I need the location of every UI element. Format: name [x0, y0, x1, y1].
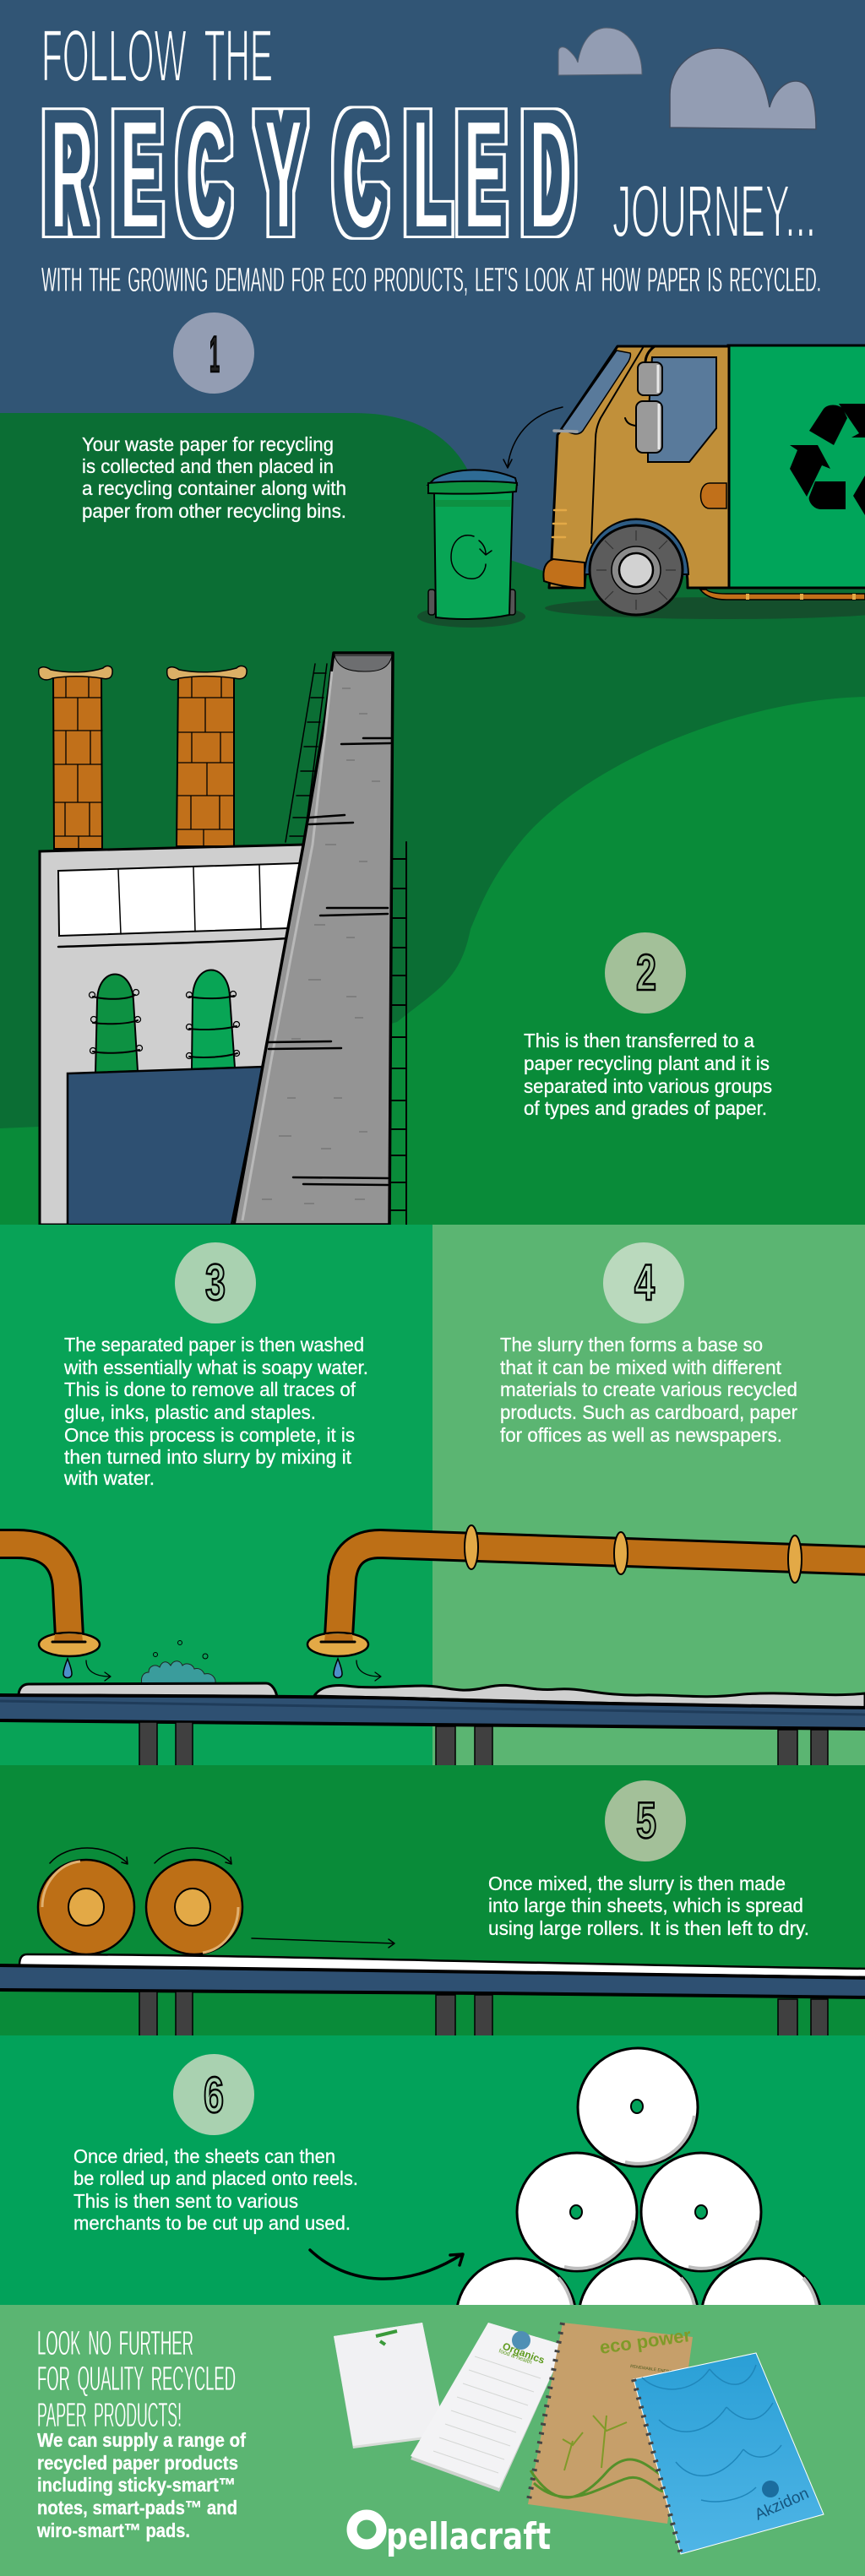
step 3 badge: 3: [205, 1254, 226, 1311]
text: FOR QUALITY RECYCLED: [37, 2359, 236, 2398]
icon: large cloud: [670, 48, 816, 129]
product: organics pad: Organics: [501, 2340, 547, 2367]
step 1 text: is collected and then placed in: [82, 455, 334, 477]
ladder left of tower: [286, 664, 327, 842]
step 5 text: Once mixed, the slurry is then made: [488, 1872, 786, 1894]
footer text: recycled paper products: [37, 2452, 238, 2474]
tower: [234, 653, 393, 1225]
footer text: We can supply a range of: [37, 2429, 246, 2451]
factory building: [40, 845, 304, 1225]
logo: pellacraft: [351, 2515, 551, 2558]
step 3 text: This is done to remove all traces of: [64, 1378, 356, 1400]
step 4 text: that it can be mixed with different: [500, 1356, 782, 1378]
arrow: to bin: [503, 407, 563, 468]
step 4 text: for offices as well as newspapers.: [500, 1424, 782, 1446]
product: eco power notebook: RENEWABLE ENERGY: [630, 2364, 676, 2376]
step 2 badge: 2: [636, 944, 656, 1001]
van shadow: [545, 597, 865, 619]
step 6 text: This is then sent to various: [73, 2190, 298, 2212]
icon: small cloud: [558, 28, 642, 75]
step 3 text: [63, 1334, 368, 1489]
step 4 badge: 4: [634, 1254, 655, 1311]
side window: [648, 357, 716, 462]
step 4 text: materials to create various recycled: [500, 1378, 797, 1400]
step 2 text: separated into various groups: [524, 1075, 772, 1097]
step 6 badge: [173, 2054, 254, 2135]
step 5 text: using large rollers. It is then left to dry.: [488, 1917, 809, 1939]
wiper: [554, 431, 577, 432]
ladder right of tower: [389, 842, 406, 1225]
product: akzidon notebook: Akzidon: [752, 2485, 812, 2524]
footer heading: LOOK NO FURTHER: [37, 2323, 193, 2362]
van: [543, 345, 865, 619]
blue panel: [68, 1067, 264, 1225]
background: sky: [0, 0, 865, 608]
title block: [41, 15, 821, 299]
title block: FOLLOW THE: [41, 15, 273, 97]
chimney right: [167, 666, 247, 846]
right pipe: [307, 1525, 865, 1681]
step 6 text: merchants to be cut up and used.: [73, 2212, 351, 2234]
step 3 text: glue, inks, plastic and staples.: [64, 1401, 316, 1423]
step 4 text: The slurry then forms a base so: [500, 1334, 763, 1356]
tray of paper: [19, 1683, 277, 1698]
conveyor table: [0, 1695, 865, 1766]
step 3 text: with water.: [63, 1467, 155, 1489]
step 1 text: paper from other recycling bins.: [82, 500, 346, 522]
product: organics pad: food & health: [498, 2348, 533, 2366]
step 3 text: then turned into slurry by mixing it: [64, 1446, 352, 1468]
tank right: [186, 970, 240, 1069]
soap splash: [141, 1640, 215, 1684]
step 2 badge: [605, 932, 686, 1014]
product: akzidon notebook: [634, 2353, 824, 2554]
arrow: sheet direction: [252, 1938, 394, 1948]
product: plain sticky pad: [334, 2323, 445, 2448]
step 6 text: Once dried, the sheets can then: [73, 2145, 335, 2167]
product: eco power notebook: eco power: [598, 2324, 693, 2358]
background: dark green hill: [0, 413, 865, 1225]
van cab: [549, 346, 729, 588]
step 6 text: be rolled up and placed onto reels.: [73, 2167, 358, 2189]
step 5 badge: 5: [636, 1792, 656, 1849]
step 2 text: [524, 1030, 772, 1119]
tower highlight: [242, 671, 332, 1220]
step 1 text: [82, 433, 346, 522]
step 1 badge: 1: [209, 326, 220, 383]
footer text: wiro-smart™ pads.: [36, 2519, 190, 2541]
logo: pellacraft: pellacraft: [386, 2515, 551, 2558]
step 3 badge: [175, 1242, 256, 1323]
product: eco power notebook: [528, 2323, 693, 2524]
step 4 badge: [603, 1242, 684, 1323]
tank left: [90, 975, 142, 1073]
van underside trim: [700, 590, 865, 600]
step 5 badge: [605, 1780, 686, 1861]
wheel: [590, 525, 683, 615]
conveyor table: [0, 1965, 865, 2036]
step 1 badge: [173, 312, 254, 394]
wheel arch: [585, 519, 688, 574]
panel: step 6 background: [0, 2035, 865, 2306]
recycling symbol: [790, 404, 865, 515]
panel: step 3 background: [0, 1225, 432, 1765]
slurry layer: [314, 1685, 865, 1709]
paper reels: [456, 2048, 821, 2377]
step 6 text: [73, 2145, 358, 2234]
pipe rings: [465, 1525, 478, 1569]
door line: [591, 346, 644, 543]
step 3 text: with essentially what is soapy water.: [63, 1356, 368, 1378]
grille marks: [552, 510, 566, 537]
panel: products footer: [0, 2305, 865, 2576]
factory windows: [58, 863, 301, 947]
step 5 text: into large thin sheets, which is spread: [488, 1894, 803, 1916]
rollers: [38, 1848, 242, 1954]
step 1 text: a recycling container along with: [82, 477, 346, 499]
windscreen: [562, 351, 630, 434]
step 4 text: products. Such as cardboard, paper: [500, 1401, 797, 1423]
footer heading: PAPER PRODUCTS!: [37, 2395, 182, 2434]
factory: [39, 653, 406, 1225]
left pipe: [0, 1544, 111, 1681]
chimney left: [39, 666, 112, 849]
step 1 text: Your waste paper for recycling: [82, 433, 334, 455]
step 2 text: of types and grades of paper.: [524, 1097, 767, 1119]
tower cracks: [269, 738, 390, 1185]
tower texture: [262, 688, 380, 1204]
icon: recycling bin: [417, 470, 525, 628]
footer text: including sticky-smart™: [37, 2474, 236, 2496]
footer heading: [37, 2323, 236, 2434]
step 5 text: [488, 1872, 809, 1939]
step 2 text: paper recycling plant and it is: [524, 1052, 770, 1074]
step 3 text: Once this process is complete, it is: [64, 1424, 355, 1446]
panel: step 5 background: [0, 1765, 865, 2035]
white paper sheet: [19, 1954, 865, 1977]
mirrors: [645, 346, 655, 363]
bumper: [543, 559, 585, 588]
step 4 text: [500, 1334, 797, 1446]
van cargo body: [728, 345, 865, 588]
footer text: [36, 2429, 246, 2541]
step 3 text: The separated paper is then washed: [64, 1334, 364, 1356]
panel: step 4 background: [432, 1225, 865, 1765]
background: lighter green hill: [0, 697, 865, 1225]
arrow: to reels: [310, 2250, 463, 2279]
step 2 text: This is then transferred to a: [524, 1030, 754, 1052]
door handle: [701, 483, 726, 508]
heading: recycled: RECYCLED: [48, 84, 570, 263]
footer text: notes, smart-pads™ and: [37, 2497, 237, 2519]
step 6 badge: 6: [204, 2067, 224, 2123]
product: organics pad: [411, 2323, 565, 2492]
